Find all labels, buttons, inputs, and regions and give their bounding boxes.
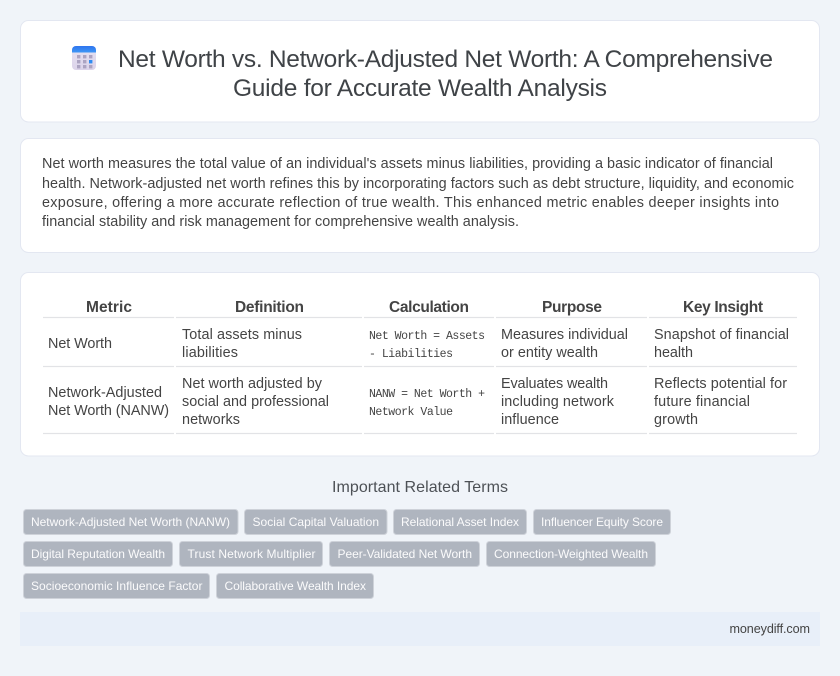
table row: Network-Adjusted Net Worth: networks — [182, 412, 240, 428]
panel: title header — [20, 20, 820, 122]
table row: Network-Adjusted Net Worth: future financial — [654, 394, 750, 410]
table row: Net Worth: Snapshot of financial — [654, 327, 789, 343]
title: Net Worth vs. Network-Adjusted Net Worth: A Comprehensive — [118, 46, 773, 73]
panel: related term tags: Collaborative Wealth Index — [224, 579, 366, 593]
panel: introduction — [20, 138, 820, 252]
table header row: Definition — [235, 299, 304, 316]
panel: related term tags: Socioeconomic Influence Factor — [31, 579, 202, 593]
panel: related term tags: Digital Reputation Wealth — [31, 547, 165, 561]
table header row: Metric — [86, 299, 132, 316]
text block: introduction paragraph: health. Network-adjusted net worth refines this by incorporating factors such as debt structure, liquidity, and economic — [42, 176, 794, 192]
table row: Net Worth: Net Worth = Assets — [369, 330, 485, 343]
table row: Network-Adjusted Net Worth: NANW = Net Worth + — [369, 388, 485, 401]
table row: Net Worth: Net Worth — [48, 336, 112, 352]
text block: introduction paragraph: financial stability and risk management for comprehensive wealth analysis. — [42, 214, 519, 230]
table row: Network-Adjusted Net Worth: Evaluates wealth — [501, 376, 608, 392]
panel: related term tags: Trust Network Multiplier — [188, 547, 316, 561]
table row: Net Worth: Measures individual — [501, 327, 628, 343]
footer source label: moneydiff.com — [730, 622, 810, 636]
panel: related term tags: Influencer Equity Score — [541, 515, 663, 529]
text block: introduction paragraph: exposure, offering a more accurate reflection of true wealth. This enhanced metric enables deeper insights into — [42, 195, 779, 211]
table row: Network-Adjusted Net Worth: influence — [501, 412, 559, 428]
text block: introduction paragraph: Net worth measures the total value of an individual's assets minus liabilities, providing a basic indicator of financial — [42, 156, 773, 172]
table row: Network-Adjusted Net Worth: including network — [501, 394, 615, 410]
table row: Network-Adjusted Net Worth: social and professional — [182, 394, 329, 410]
table row: Network-Adjusted Net Worth: Network Value — [369, 406, 453, 419]
title — [118, 46, 773, 102]
panel: related term tags: Peer-Validated Net Worth — [338, 547, 472, 561]
table row: Net Worth: Total assets minus — [182, 327, 302, 343]
panel: comparison table — [20, 272, 820, 456]
table header row: Key Insight — [683, 299, 763, 316]
icon: calendar — [72, 46, 96, 70]
table row: Network-Adjusted Net Worth: growth — [654, 412, 698, 428]
table row: Net Worth: or entity wealth — [501, 345, 598, 361]
table header row: Calculation — [389, 299, 469, 316]
heading: Important Related Terms: Important Related Terms — [332, 479, 508, 496]
table row: Network-Adjusted Net Worth: Network-Adjusted — [48, 385, 162, 401]
panel: related term tags: Social Capital Valuation — [252, 515, 379, 529]
title: Guide for Accurate Wealth Analysis — [233, 75, 607, 102]
table row: Net Worth: liabilities — [182, 345, 238, 361]
table header row — [86, 299, 763, 316]
table row: Network-Adjusted Net Worth: Net worth adjusted by — [182, 376, 323, 392]
footer bar — [20, 612, 820, 646]
table header row: Purpose — [542, 299, 602, 316]
table row: Net Worth: health — [654, 345, 693, 361]
table row: Net Worth — [48, 327, 789, 361]
table row: Network-Adjusted Net Worth: Net Worth (NANW) — [48, 403, 169, 419]
panel: related term tags — [24, 510, 670, 598]
panel: related term tags: Connection-Weighted Wealth — [494, 547, 648, 561]
table row: Net Worth: - Liabilities — [369, 348, 453, 361]
panel: related term tags: Network-Adjusted Net Worth (NANW) — [31, 515, 230, 529]
table row: Network-Adjusted Net Worth: Reflects potential for — [654, 376, 787, 392]
table row: Network-Adjusted Net Worth — [48, 376, 787, 428]
text block: introduction paragraph — [42, 156, 794, 230]
panel: related term tags: Relational Asset Index — [401, 515, 519, 529]
